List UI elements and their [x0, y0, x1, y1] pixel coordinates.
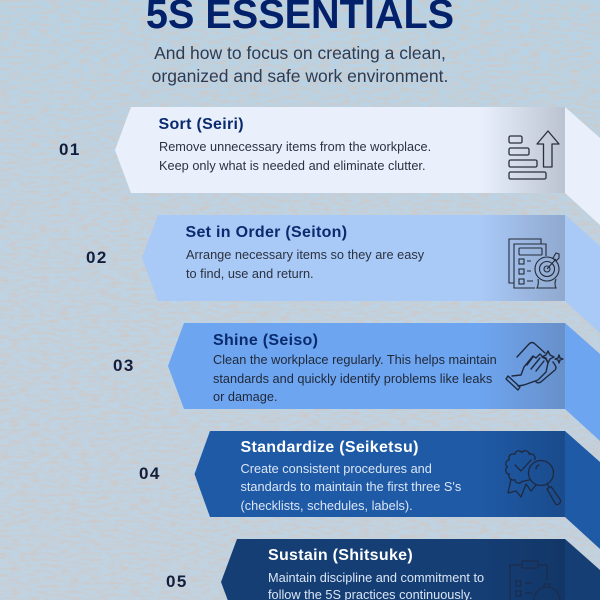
- body text: standards to maintain the first three S's: [240, 479, 461, 494]
- number 05: 05: [166, 572, 188, 591]
- icon: badge and magnifier: [506, 451, 561, 505]
- body text: Clean the workplace regularly. This helps maintain: [213, 352, 497, 367]
- heading: Sustain (Shitsuke): [268, 547, 413, 564]
- icon: checklist and target: [509, 239, 559, 288]
- heading: Sort (Seiri): [158, 116, 244, 132]
- body text: [186, 247, 424, 281]
- subtitle: organized and safe work environment.: [152, 66, 448, 86]
- heading: Set in Order (Seiton): [186, 224, 347, 240]
- body text: or damage.: [213, 389, 278, 404]
- body text: Keep only what is needed and eliminate clutter.: [159, 158, 426, 173]
- panel: 05 Sustain: [166, 539, 600, 600]
- panel: 04 Standardize: [139, 431, 600, 549]
- subtitle: And how to focus on creating a clean,: [154, 42, 446, 62]
- panel: 01 Sort: [59, 107, 600, 225]
- number 01: 01: [59, 140, 81, 159]
- body text: [240, 460, 461, 512]
- number 04: 04: [139, 464, 161, 483]
- body text: standards and quickly identify problems like leaks: [213, 370, 492, 386]
- heading: Standardize (Seiketsu): [240, 439, 419, 456]
- panel: 02 Set in Order: [86, 215, 600, 333]
- body text: [159, 139, 431, 173]
- body text: [268, 570, 484, 600]
- number 03: 03: [113, 356, 135, 375]
- body text: Maintain discipline and commitment to: [268, 570, 484, 585]
- body text: Arrange necessary items so they are easy: [186, 247, 424, 262]
- body text: [213, 352, 497, 404]
- icon: clipboard and stopwatch: [510, 561, 560, 600]
- body text: Create consistent procedures and: [240, 460, 432, 476]
- body text: to find, use and return.: [186, 266, 314, 281]
- body text: Remove unnecessary items from the workplace.: [159, 139, 431, 154]
- number 02: 02: [86, 248, 108, 267]
- heading: Shine (Seiso): [213, 332, 318, 348]
- panel: 03 Shine: [113, 323, 600, 441]
- icon: sort bars and arrow: [509, 131, 559, 179]
- body text: (checklists, schedules, labels).: [240, 498, 413, 512]
- subtitle: [152, 42, 448, 86]
- icon: hand wiping: [506, 342, 563, 390]
